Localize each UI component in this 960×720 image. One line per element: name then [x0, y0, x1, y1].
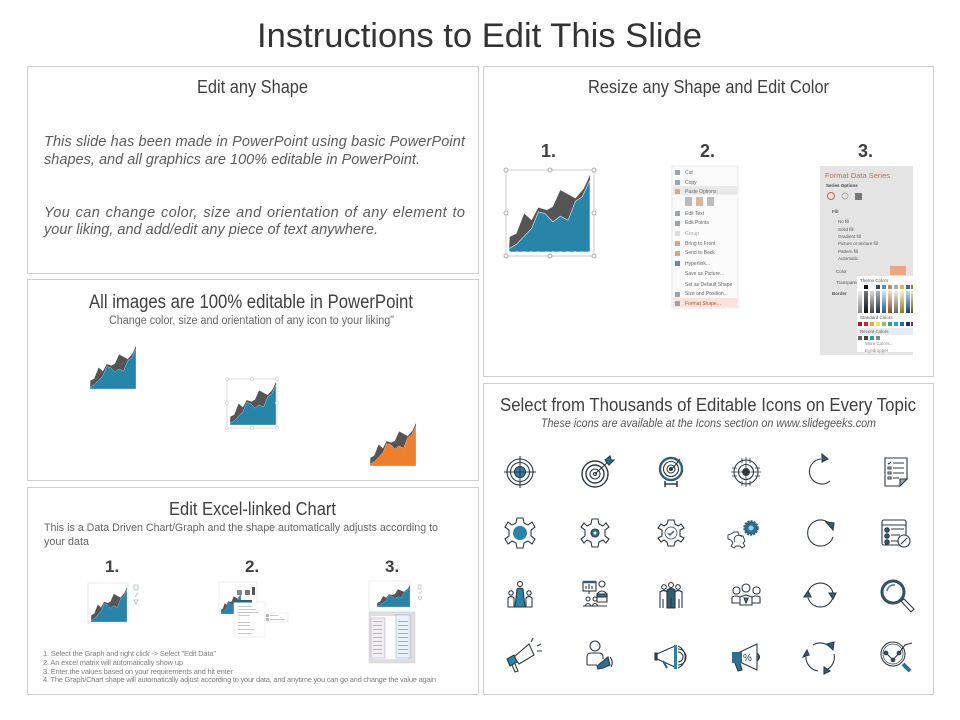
text block: data driven — [44, 522, 438, 548]
step numbers: 2. — [700, 141, 715, 161]
format data series pane: More Colors... — [865, 341, 893, 346]
text block: intro paragraphs: your liking, and add/edit any piece of text anywhere. — [43, 222, 378, 238]
format data series pane: Fill — [832, 209, 838, 214]
icon: three arrows cycle — [803, 642, 834, 674]
instructions list: 1. Select the Graph and right click -> Select "Edit Data" — [43, 649, 216, 658]
context menu: Save as Picture... — [685, 271, 724, 277]
icon: crosshair target — [504, 456, 536, 488]
format data series pane: Border — [832, 291, 847, 296]
format data series pane — [820, 166, 913, 355]
context menu: Edit Text — [685, 211, 705, 217]
icon: percent megaphone: % — [743, 653, 752, 664]
icon: checklist document — [885, 458, 907, 486]
step 1 chart thumbnail — [88, 583, 138, 623]
instructions list: 2. An excel matrix will automatically show up — [43, 658, 183, 667]
icon: circular arrow closed — [808, 520, 834, 546]
text block: data driven: your data — [44, 536, 90, 548]
heading: all images editable: All images are 100% editable in PowerPoint — [89, 292, 414, 313]
context menu: Paste Options: — [685, 189, 718, 195]
heading: editable icons: Select from Thousands of Editable Icons on Every Topic — [500, 395, 916, 415]
icon: two arrows cycle — [804, 583, 836, 607]
context menu: Size and Position... — [685, 291, 728, 297]
icon: magnifier — [882, 581, 914, 612]
instructions list — [43, 649, 436, 684]
panel: editable icons — [484, 384, 934, 694]
text block: intro paragraphs: shapes, and all graphics are 100% editable in PowerPoint. — [44, 152, 420, 168]
icon: gear check — [658, 520, 684, 546]
icon: gear solid — [505, 518, 535, 548]
instructions list: 3. Enter the values based on your requirements and hit enter — [43, 667, 234, 676]
format data series pane: Theme Colors — [860, 278, 889, 283]
text block: intro paragraphs: You can change color, size and orientation of any element to — [44, 205, 465, 221]
standard colour swatches — [858, 322, 913, 326]
text block: data driven: This is a Data Driven Chart/Graph and the shape automatically adjusts according to — [44, 522, 438, 534]
icon: meeting people — [508, 582, 532, 607]
icon: person with megaphone — [587, 641, 612, 669]
step 2 chart with context menu — [219, 582, 288, 637]
format data series pane: Series Options — [826, 183, 858, 188]
icon: business team — [660, 582, 682, 608]
icon: gear ring — [581, 519, 609, 547]
step numbers: 2. — [245, 557, 259, 576]
format data series pane: Pattern fill — [838, 249, 858, 254]
format data series pane: Picture or texture fill — [838, 241, 878, 246]
step 3 chart with excel matrix — [369, 581, 422, 663]
format data series pane: Transparency — [836, 280, 864, 285]
icon: reticle — [731, 457, 761, 487]
theme colour swatches — [858, 285, 913, 313]
heading: edit any shape: Edit any Shape — [197, 77, 308, 97]
icon: circular arrow open — [809, 454, 830, 484]
context menu: Group — [685, 231, 699, 237]
subheading: change color: Change color, size and orientation of any icon to your liking" — [109, 315, 394, 327]
title: Instructions to Edit This Slide — [257, 17, 702, 55]
selected chart — [504, 168, 596, 258]
step numbers — [105, 557, 399, 576]
context menu: Hyperlink... — [685, 261, 710, 267]
heading: resize any shape: Resize any Shape and Edit Color — [588, 77, 829, 97]
icon: presenter — [583, 581, 607, 606]
context menu: Cut — [685, 170, 693, 176]
format data series pane: Eyedropper — [865, 348, 889, 353]
context menu: Send to Back — [685, 250, 715, 256]
subheading: icons section: These icons are available at the Icons section on www.slidegeeks.com — [541, 418, 876, 430]
icon: magnifier with graph — [881, 642, 912, 671]
context menu — [672, 166, 738, 308]
icon: percent megaphone — [733, 644, 760, 671]
panel: resize any shape — [484, 66, 934, 376]
icon: two gears — [728, 522, 758, 548]
icon: target with dart — [582, 456, 614, 487]
chart: blue selected — [226, 378, 278, 430]
panel: edit excel-linked chart — [28, 488, 478, 694]
step numbers — [541, 141, 873, 161]
format data series pane: Format Data Series — [825, 171, 890, 180]
icon: megaphone — [507, 638, 542, 672]
format data series pane: Gradient fill — [838, 234, 861, 239]
chart: orange — [370, 423, 416, 466]
format data series pane: Standard Colors — [860, 315, 893, 320]
context menu: Set as Default Shape — [685, 282, 732, 288]
step numbers: 1. — [541, 141, 556, 161]
chart: blue — [90, 346, 136, 389]
text block: intro paragraphs: This slide has been made in PowerPoint using basic PowerPoint — [44, 134, 466, 150]
step numbers: 1. — [105, 557, 119, 576]
icon: three profiles — [732, 584, 760, 605]
icon: browser checklist — [882, 520, 910, 547]
icon: target on stand — [660, 458, 682, 487]
instructions list: 4. The Graph/Chart shape will automatically adjust according to your data, and anytime you can go and change the value again — [43, 675, 436, 684]
panel: all images editable — [28, 280, 478, 480]
format data series pane: Solid fill — [838, 227, 854, 232]
step numbers: 3. — [385, 557, 399, 576]
context menu: Bring to Front — [685, 241, 716, 247]
format data series pane: Color — [836, 269, 847, 274]
icon: megaphone side — [655, 645, 686, 669]
format data series pane: No fill — [838, 219, 849, 224]
context menu: Format Shape... — [685, 301, 721, 307]
context menu: Edit Points — [685, 220, 709, 226]
text block: intro paragraphs — [43, 134, 466, 238]
step numbers: 3. — [858, 141, 873, 161]
format data series pane: Recent Colors — [860, 329, 889, 334]
heading: edit excel-linked chart: Edit Excel-linked Chart — [169, 499, 336, 519]
panel: edit any shape — [28, 66, 478, 274]
context menu: Copy — [685, 180, 697, 186]
format data series pane: Automatic — [838, 256, 859, 261]
